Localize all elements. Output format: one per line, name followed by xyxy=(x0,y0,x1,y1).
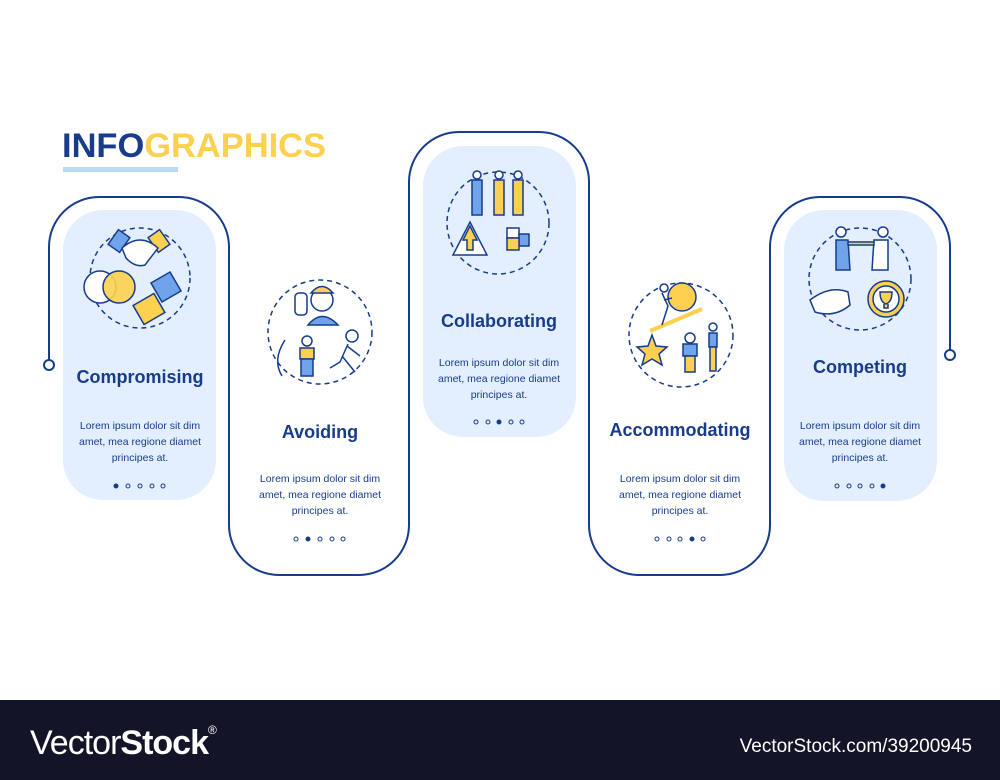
footer bar: VectorStock.com/39200945 xyxy=(740,736,972,757)
heading: Compromising xyxy=(76,367,204,387)
progress dots xyxy=(294,537,345,541)
panel: competing xyxy=(799,227,921,488)
progress dots xyxy=(114,484,165,488)
text block: amet, mea regione diamet xyxy=(259,489,381,501)
heading: Avoiding xyxy=(282,422,358,442)
text block: amet, mea regione diamet xyxy=(79,436,201,448)
text block: principes at. xyxy=(292,505,348,517)
panel: avoiding xyxy=(259,280,381,541)
icon: handshake puzzle xyxy=(84,228,190,328)
text block: Lorem ipsum dolor sit dim xyxy=(80,420,200,432)
heading: Collaborating xyxy=(441,311,557,331)
title: INFOGRAPHICS xyxy=(62,127,326,165)
connecting serpentine outline xyxy=(44,132,955,575)
icon: team xyxy=(447,171,549,274)
icon: accommodating xyxy=(629,283,733,387)
footer bar: ® xyxy=(208,723,217,737)
text block: principes at. xyxy=(652,505,708,517)
text block: amet, mea regione diamet xyxy=(799,436,921,448)
text block: Lorem ipsum dolor sit dim xyxy=(439,357,559,369)
text block: principes at. xyxy=(832,452,888,464)
icon: competing xyxy=(809,227,911,330)
text block: Lorem ipsum dolor sit dim xyxy=(800,420,920,432)
panel: compromising xyxy=(76,228,204,488)
text block: Lorem ipsum dolor sit dim xyxy=(260,473,380,485)
progress dots xyxy=(835,484,885,488)
panel fills xyxy=(63,146,937,501)
panel: collaborating xyxy=(438,171,560,424)
heading: Competing xyxy=(813,357,907,377)
footer bar xyxy=(0,700,1000,780)
panel: accommodating xyxy=(609,283,751,541)
footer bar: VectorStock xyxy=(30,724,208,762)
heading: Accommodating xyxy=(609,420,751,440)
text block: amet, mea regione diamet xyxy=(438,373,560,385)
text block: principes at. xyxy=(112,452,168,464)
text block: principes at. xyxy=(471,389,527,401)
progress dots xyxy=(655,537,705,541)
icon: avoiding xyxy=(268,280,372,384)
progress dots xyxy=(474,420,524,424)
text block: amet, mea regione diamet xyxy=(619,489,741,501)
text block: Lorem ipsum dolor sit dim xyxy=(620,473,740,485)
